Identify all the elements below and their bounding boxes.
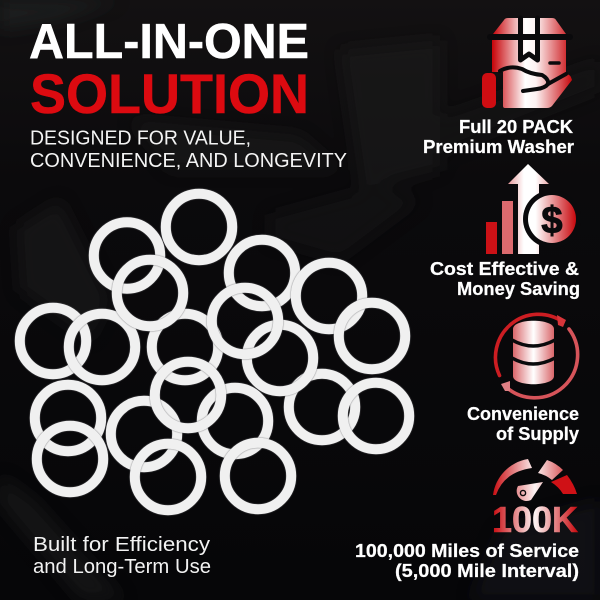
subtitle: DESIGNED FOR VALUE, — [30, 126, 251, 150]
title line: SOLUTION: SOLUTION — [30, 62, 309, 125]
icon: bars, arrow and dollar coin: $ — [541, 200, 563, 242]
feature label: cost: Money Saving — [457, 279, 580, 299]
feature label: supply — [467, 404, 579, 444]
feature label: service miles — [355, 541, 579, 581]
title line: ALL-IN-ONE: ALL-IN-ONE — [29, 15, 309, 69]
feature label: cost — [430, 259, 580, 299]
bottom caption: Built for Efficiency — [33, 534, 210, 556]
feature label: 20 pack: Full 20 PACK — [459, 117, 573, 137]
bottom caption: and Long-Term Use — [33, 556, 211, 578]
subtitle — [30, 126, 347, 172]
bottom caption — [33, 534, 211, 578]
feature label: supply: of Supply — [496, 424, 579, 444]
feature label: 20 pack: Premium Washer — [423, 137, 574, 157]
feature label: service miles: 100,000 Miles of Service — [355, 541, 579, 561]
feature label: supply: Convenience — [467, 404, 579, 424]
subtitle: CONVENIENCE, AND LONGEVITY — [30, 149, 347, 172]
icon: box on hand — [482, 18, 572, 108]
product: twenty white washers — [20, 194, 409, 510]
big number: 100K: 100K — [492, 499, 578, 540]
feature label: cost: Cost Effective & — [430, 259, 579, 279]
feature label: service miles: (5,000 Mile Interval) — [395, 561, 579, 581]
feature label: 20 pack — [423, 117, 574, 157]
icon: speedometer — [493, 459, 577, 501]
icon: database cylinder with cycle arrows — [495, 314, 578, 398]
icon: bars, arrow and dollar coin — [486, 164, 581, 254]
title — [29, 15, 309, 125]
